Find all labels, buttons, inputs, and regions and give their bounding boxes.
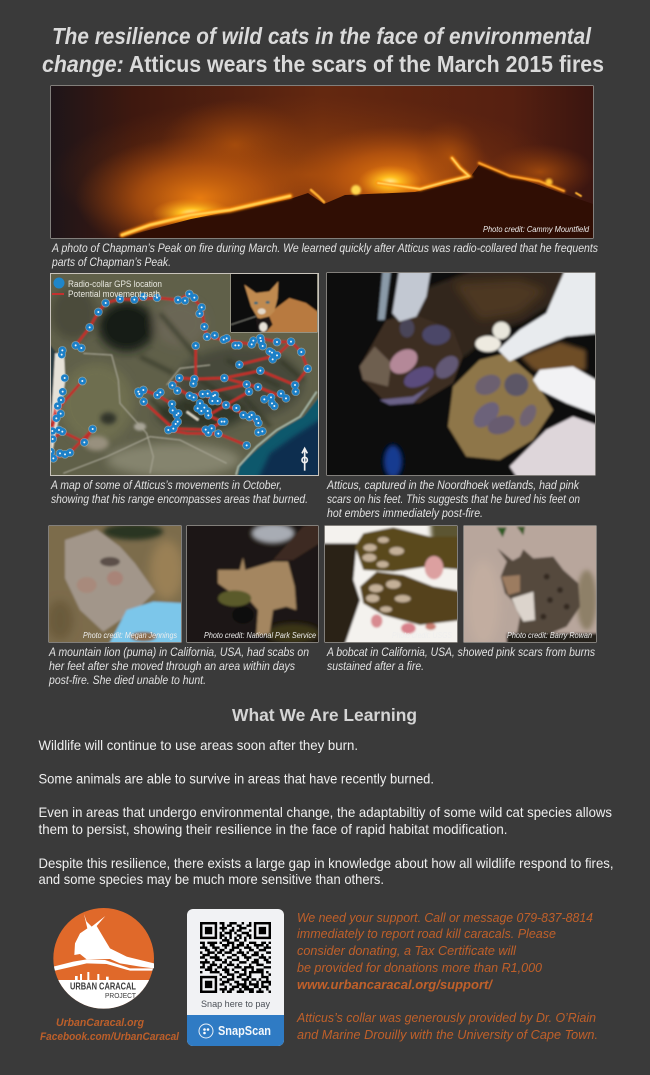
- text block: call for support: We need your support. Call or message 079-837-8814: [297, 910, 593, 925]
- terrain: [50, 287, 303, 477]
- map of Atticus's movements: [44, 267, 325, 482]
- text block: call for support: immediately to report road kill caracals. Please: [297, 926, 556, 941]
- text block: call for support: be provided for donations more than R1,000: [297, 960, 543, 975]
- movement paths: [51, 294, 308, 458]
- text block: what we are learning: Even in areas that undergo environmental change, the adaptabiltiy of some wild cat species allows: [38, 804, 612, 820]
- logo: Urban Caracal Project: URBAN CARACAL: [70, 981, 136, 992]
- north arrow: [302, 448, 307, 471]
- text block: what we are learning: Despite this resilience, there exists a large gap in knowledge about how all wildlife respond to fires,: [38, 855, 614, 871]
- title: change: Atticus wears the scars of the March 2015 fires: [42, 51, 604, 77]
- caption: fire photo: [51, 243, 598, 269]
- photo: mountain lion on camera trap: [180, 519, 325, 649]
- legend: Radio-collar GPS location: [68, 279, 162, 289]
- caption: bobcat: sustained after a fire.: [327, 661, 424, 673]
- inset: caracal portrait: [224, 267, 324, 339]
- caption: bobcat: [326, 647, 595, 673]
- photo: bobcat paws: [318, 519, 464, 649]
- fur body: [386, 267, 573, 370]
- caption: mountain lion: A mountain lion (puma) in California, USA, had scabs on: [48, 647, 309, 659]
- icon: SnapScan: [199, 1024, 213, 1038]
- text block: what we are learning: [38, 737, 614, 887]
- title: [42, 23, 604, 77]
- label: SnapScan: SnapScan: [218, 1024, 271, 1038]
- caption: map: showing that his range encompasses areas that burned.: [51, 494, 308, 506]
- logo: Urban Caracal Project: [53, 908, 154, 1009]
- right paw: [448, 353, 553, 460]
- photo: mountain lion paw: [42, 519, 188, 649]
- caption: paws: Atticus, captured in the Noordhoek wetlands, had pink: [326, 480, 580, 492]
- QR code: [200, 923, 271, 992]
- text block: call for support: and Marine Drouilly with the University of Cape Town.: [297, 1027, 598, 1042]
- logo: Urban Caracal Project: PROJECT: [105, 991, 136, 1000]
- photo: Chapman's Peak on fire: [50, 86, 595, 260]
- text block: call for support: Atticus’s collar was generously provided by Dr. O’Riain: [296, 1010, 596, 1025]
- SnapScan QR card: [187, 909, 284, 1046]
- text block: call for support: www.urbancaracal.org/support/: [297, 977, 493, 992]
- title: The resilience of wild cats in the face of environmental: [52, 23, 591, 49]
- photo credit: Photo credit: Cammy Mountfield: [483, 225, 590, 234]
- photo: bobcat portrait: [457, 519, 603, 649]
- text block: what we are learning: them to persist, showing their resilience in the face of rapid habitat modification.: [38, 821, 508, 837]
- legend: Potential movement path: [68, 289, 160, 299]
- photo credit: Photo credit: Megan Jennings: [83, 631, 177, 640]
- text block: call for support: consider donating, a Tax Certificate will: [297, 943, 517, 958]
- heading: What We Are Learning: What We Are Learning: [232, 705, 417, 725]
- links: website and Facebook: Facebook.com/UrbanCaracal: [40, 1031, 180, 1043]
- roads: [63, 353, 227, 473]
- caption: bobcat: A bobcat in California, USA, showed pink scars from burns: [326, 647, 595, 659]
- links: website and Facebook: UrbanCaracal.org: [56, 1017, 144, 1029]
- caption: mountain lion: her feet after she moved through an area within days: [49, 661, 295, 673]
- left paw: [360, 316, 463, 403]
- ocean: [237, 390, 325, 482]
- text block: what we are learning: Some animals are able to survive in areas that have recently burned.: [38, 770, 434, 786]
- photo credit: Photo credit: National Park Service: [204, 631, 316, 640]
- text block: what we are learning: and some species may be much more sensitive than others.: [38, 871, 384, 887]
- gloves: [392, 267, 431, 322]
- caption: paws: [326, 480, 580, 520]
- caption: paws: hot embers immediately post-fire.: [327, 508, 483, 520]
- text block: call for support: [296, 910, 598, 1042]
- caption: fire photo: A photo of Chapman’s Peak on fire during March. We learned quickly after Atticus was radio-collared that he frequents: [51, 243, 598, 255]
- photo credit: Photo credit: Barry Rowan: [507, 631, 593, 640]
- caption: fire photo: parts of Chapman’s Peak.: [51, 257, 171, 269]
- caption: mountain lion: [48, 647, 309, 687]
- links: website and Facebook: [40, 1017, 180, 1043]
- photo credit: Photo credit: USGS: [392, 631, 453, 640]
- caption: map: A map of some of Atticus’s movements in October,: [50, 480, 282, 492]
- legend: [52, 278, 162, 299]
- photo: Atticus's burned paws: [320, 267, 602, 481]
- caption: mountain lion: post-fire. She died unable to hunt.: [48, 675, 206, 687]
- label: Snap here to pay: Snap here to pay: [201, 999, 270, 1010]
- GPS pins: [51, 294, 308, 458]
- caption: paws: scars on his feet. This suggests that he bured his feet on: [327, 494, 580, 506]
- caption: map: [50, 480, 308, 506]
- text block: what we are learning: Wildlife will continue to use areas soon after they burn.: [38, 737, 358, 753]
- shoreline: [44, 337, 57, 430]
